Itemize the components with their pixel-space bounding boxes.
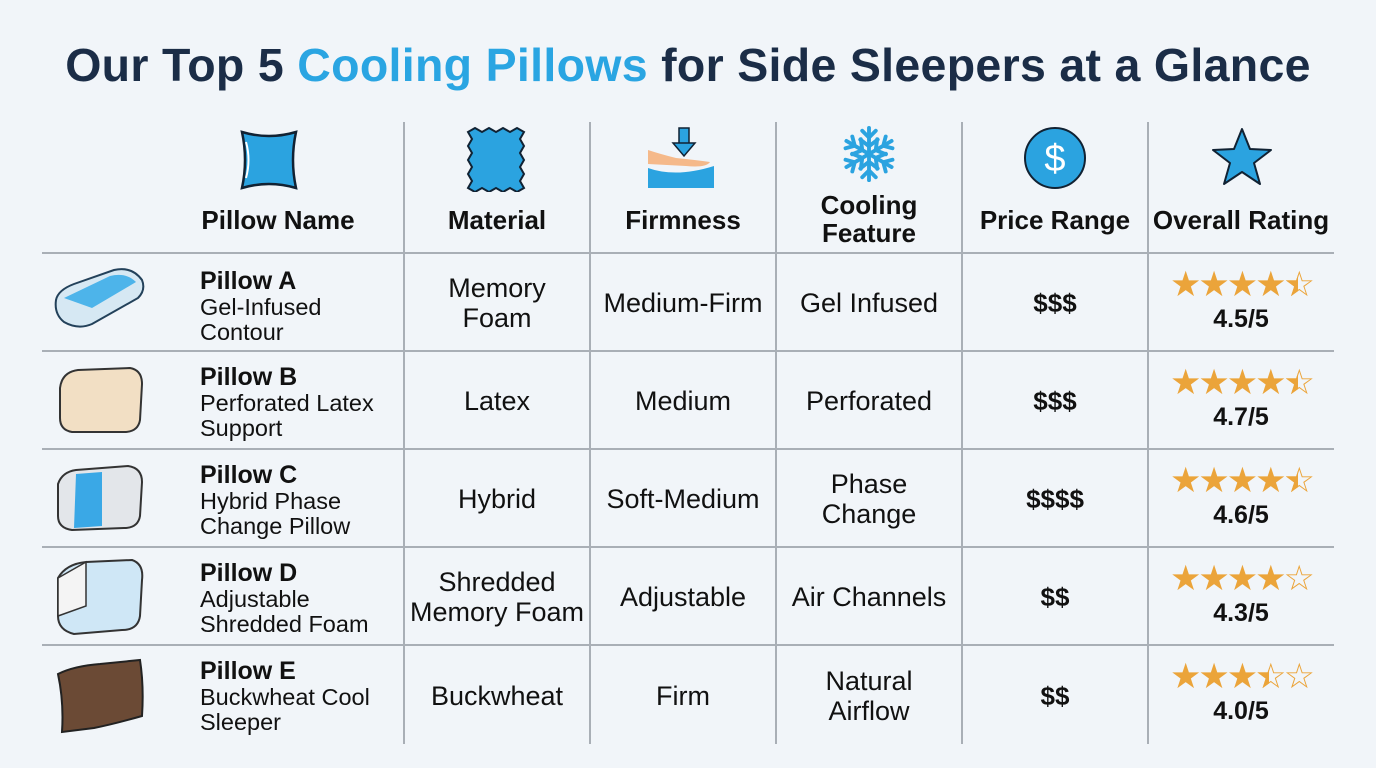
text: $$: [1041, 681, 1069, 711]
header: Material: Material: [448, 205, 546, 235]
icon: dollar: $: [1044, 138, 1066, 180]
header: Pillow Name: Pillow Name: [201, 205, 355, 235]
row C name: Hybrid Phase: [200, 488, 341, 514]
row C name: Pillow C: [200, 461, 297, 489]
rating E: ★★★ ☆: [1170, 657, 1312, 696]
text: Latex: [464, 386, 530, 416]
rating B: ☆: [1284, 363, 1312, 402]
icon: snowflake: [844, 126, 894, 182]
header: Overall Rating: Overall Rating: [1153, 205, 1329, 235]
header: Cooling Feature: [821, 190, 917, 248]
text: Perforated: [806, 386, 932, 416]
text: Air Channels: [792, 582, 946, 612]
row D name: [200, 559, 369, 637]
text: Medium-Firm: [604, 288, 762, 318]
text: Gel Infused: [800, 288, 938, 318]
row A name: Pillow A: [200, 267, 296, 295]
rating A: [1170, 265, 1313, 333]
text: Shredded: [438, 567, 556, 597]
header: Cooling Feature: Feature: [822, 218, 916, 248]
row A name: Gel-Infused: [200, 294, 321, 320]
row E name: Sleeper: [200, 709, 281, 735]
title: Our Top 5 Cooling Pillows for Side Sleepers at a Glance: [65, 39, 1311, 91]
rating A: 4.5/5: [1213, 305, 1269, 333]
text: Foam: [462, 303, 532, 333]
row E name: Pillow E: [200, 657, 296, 685]
text: Buckwheat: [431, 681, 563, 711]
row B name: Perforated Latex: [200, 390, 374, 416]
text: Memory Foam: [410, 597, 584, 627]
row E name: Buckwheat Cool: [200, 684, 370, 710]
text: $$: [1041, 582, 1069, 612]
text: Natural: [825, 666, 913, 696]
text: Airflow: [828, 696, 910, 726]
icon: star: [1212, 128, 1272, 185]
row B name: Pillow B: [200, 363, 297, 391]
header: Firmness: Firmness: [625, 205, 741, 235]
rating D: 4.3/5: [1213, 599, 1269, 627]
row D name: Shredded Foam: [200, 611, 369, 637]
row B image: [59, 367, 143, 433]
rating D: [1170, 559, 1312, 627]
rating A: ★★★★: [1170, 265, 1284, 304]
row E name: [200, 657, 370, 735]
text: Phase: [831, 469, 907, 499]
row C name: [200, 461, 350, 539]
row D name: Adjustable: [200, 586, 310, 612]
row A image: [54, 268, 144, 328]
row B name: [200, 363, 374, 441]
icon: pillow: [240, 130, 298, 190]
rating E: ☆: [1255, 657, 1284, 696]
rating B: [1170, 363, 1313, 431]
row A name: Contour: [200, 319, 284, 345]
text: $$$: [1033, 288, 1077, 318]
rating B: 4.7/5: [1213, 403, 1269, 431]
rating C: ★★★★: [1170, 461, 1284, 500]
header: Cooling Feature: Cooling: [821, 190, 917, 220]
row A name: [200, 267, 321, 345]
text: Hybrid: [458, 484, 536, 514]
text: Medium: [635, 386, 731, 416]
row C image: [57, 465, 143, 531]
rating B: ★★★★: [1170, 363, 1284, 402]
rating C: ☆: [1284, 461, 1312, 500]
row B name: Support: [200, 415, 282, 441]
row D name: Pillow D: [200, 559, 297, 587]
row D image: [57, 559, 144, 635]
text: Soft-Medium: [606, 484, 760, 514]
rating E: [1170, 657, 1313, 725]
text: Change: [822, 499, 916, 529]
text: Adjustable: [620, 582, 746, 612]
rating C: 4.6/5: [1213, 501, 1269, 529]
text: Memory: [448, 273, 546, 303]
icon: material swatch: [466, 126, 526, 192]
text: $$$: [1033, 386, 1077, 416]
row E image: [56, 658, 144, 734]
header: Price Range: Price Range: [980, 205, 1130, 235]
rating E: 4.0/5: [1213, 697, 1269, 725]
rating A: ☆: [1284, 265, 1312, 304]
row C name: Change Pillow: [200, 513, 350, 539]
rating D: ★★★★☆: [1170, 559, 1312, 598]
rating C: [1170, 461, 1313, 529]
text: Firm: [656, 681, 710, 711]
icon: firmness: [648, 127, 714, 188]
icon: dollar: [1024, 127, 1086, 189]
text: $$$$: [1026, 484, 1084, 514]
